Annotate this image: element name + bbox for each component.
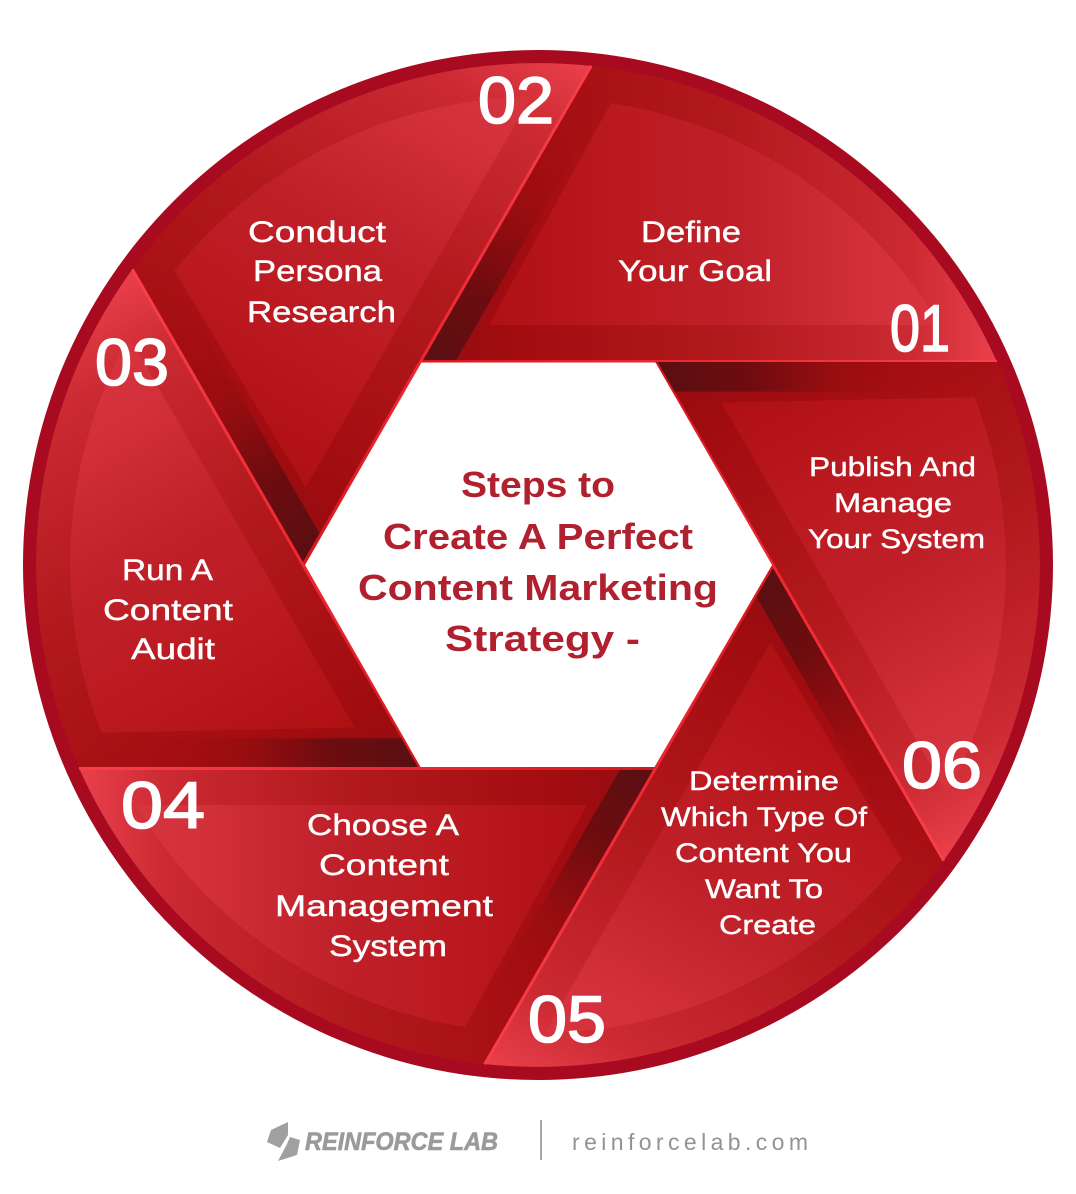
panel: blade 02	[47, 0, 593, 565]
step 05 label: Create	[719, 910, 816, 940]
step 03 label: Run A	[122, 554, 213, 587]
step number 03: 03	[95, 325, 169, 399]
step 06 label: Your System	[808, 524, 985, 554]
step number 02: 02	[478, 63, 554, 137]
title: Create A Perfect	[383, 516, 693, 557]
panel: blade 03	[0, 268, 422, 916]
footer brand name: REINFORCE LAB	[305, 1128, 498, 1156]
step number 04: 04	[121, 768, 205, 842]
step 01 label: Your Goal	[618, 255, 772, 288]
step 01 label: Define	[641, 216, 741, 249]
step 02 label	[247, 216, 396, 329]
footer logo icon	[267, 1122, 300, 1161]
step 02 label: Persona	[253, 255, 382, 288]
panel: blade 05	[483, 565, 1029, 1194]
step 03 label: Audit	[131, 633, 216, 666]
step 06 label: Manage	[834, 488, 952, 518]
step 03 label: Content	[103, 594, 234, 627]
step 04 label: Management	[275, 890, 494, 923]
step 01 label	[618, 216, 772, 288]
step 05 label: Determine	[689, 766, 839, 796]
step 02 label: Conduct	[248, 216, 387, 249]
step 06 label	[808, 452, 985, 554]
step number 05: 05	[528, 982, 606, 1056]
footer website: reinforcelab.com	[572, 1129, 808, 1155]
step 04 label: Choose A	[307, 809, 459, 842]
title: Steps to	[461, 464, 615, 505]
step number 06: 06	[902, 728, 982, 802]
step 04 label	[275, 809, 494, 963]
panel: blade 04	[79, 767, 655, 1064]
title: Strategy -	[445, 618, 640, 659]
step 05 label: Which Type Of	[661, 802, 868, 832]
step 03 label	[103, 554, 234, 666]
panel: blade 01	[421, 66, 997, 363]
step 05 label: Content You	[675, 838, 852, 868]
center hexagon	[305, 362, 772, 767]
step 02 label: Research	[247, 296, 396, 329]
step 05 label	[661, 766, 868, 940]
title	[358, 464, 718, 659]
step 05 label: Want To	[705, 874, 823, 904]
step number 01: 01	[890, 291, 950, 365]
title: Content Marketing	[358, 567, 718, 608]
panel: blade 06	[654, 214, 1076, 862]
footer divider	[540, 1120, 542, 1160]
step 06 label: Publish And	[809, 452, 976, 482]
step 04 label: System	[329, 930, 447, 963]
step 04 label: Content	[319, 849, 450, 882]
